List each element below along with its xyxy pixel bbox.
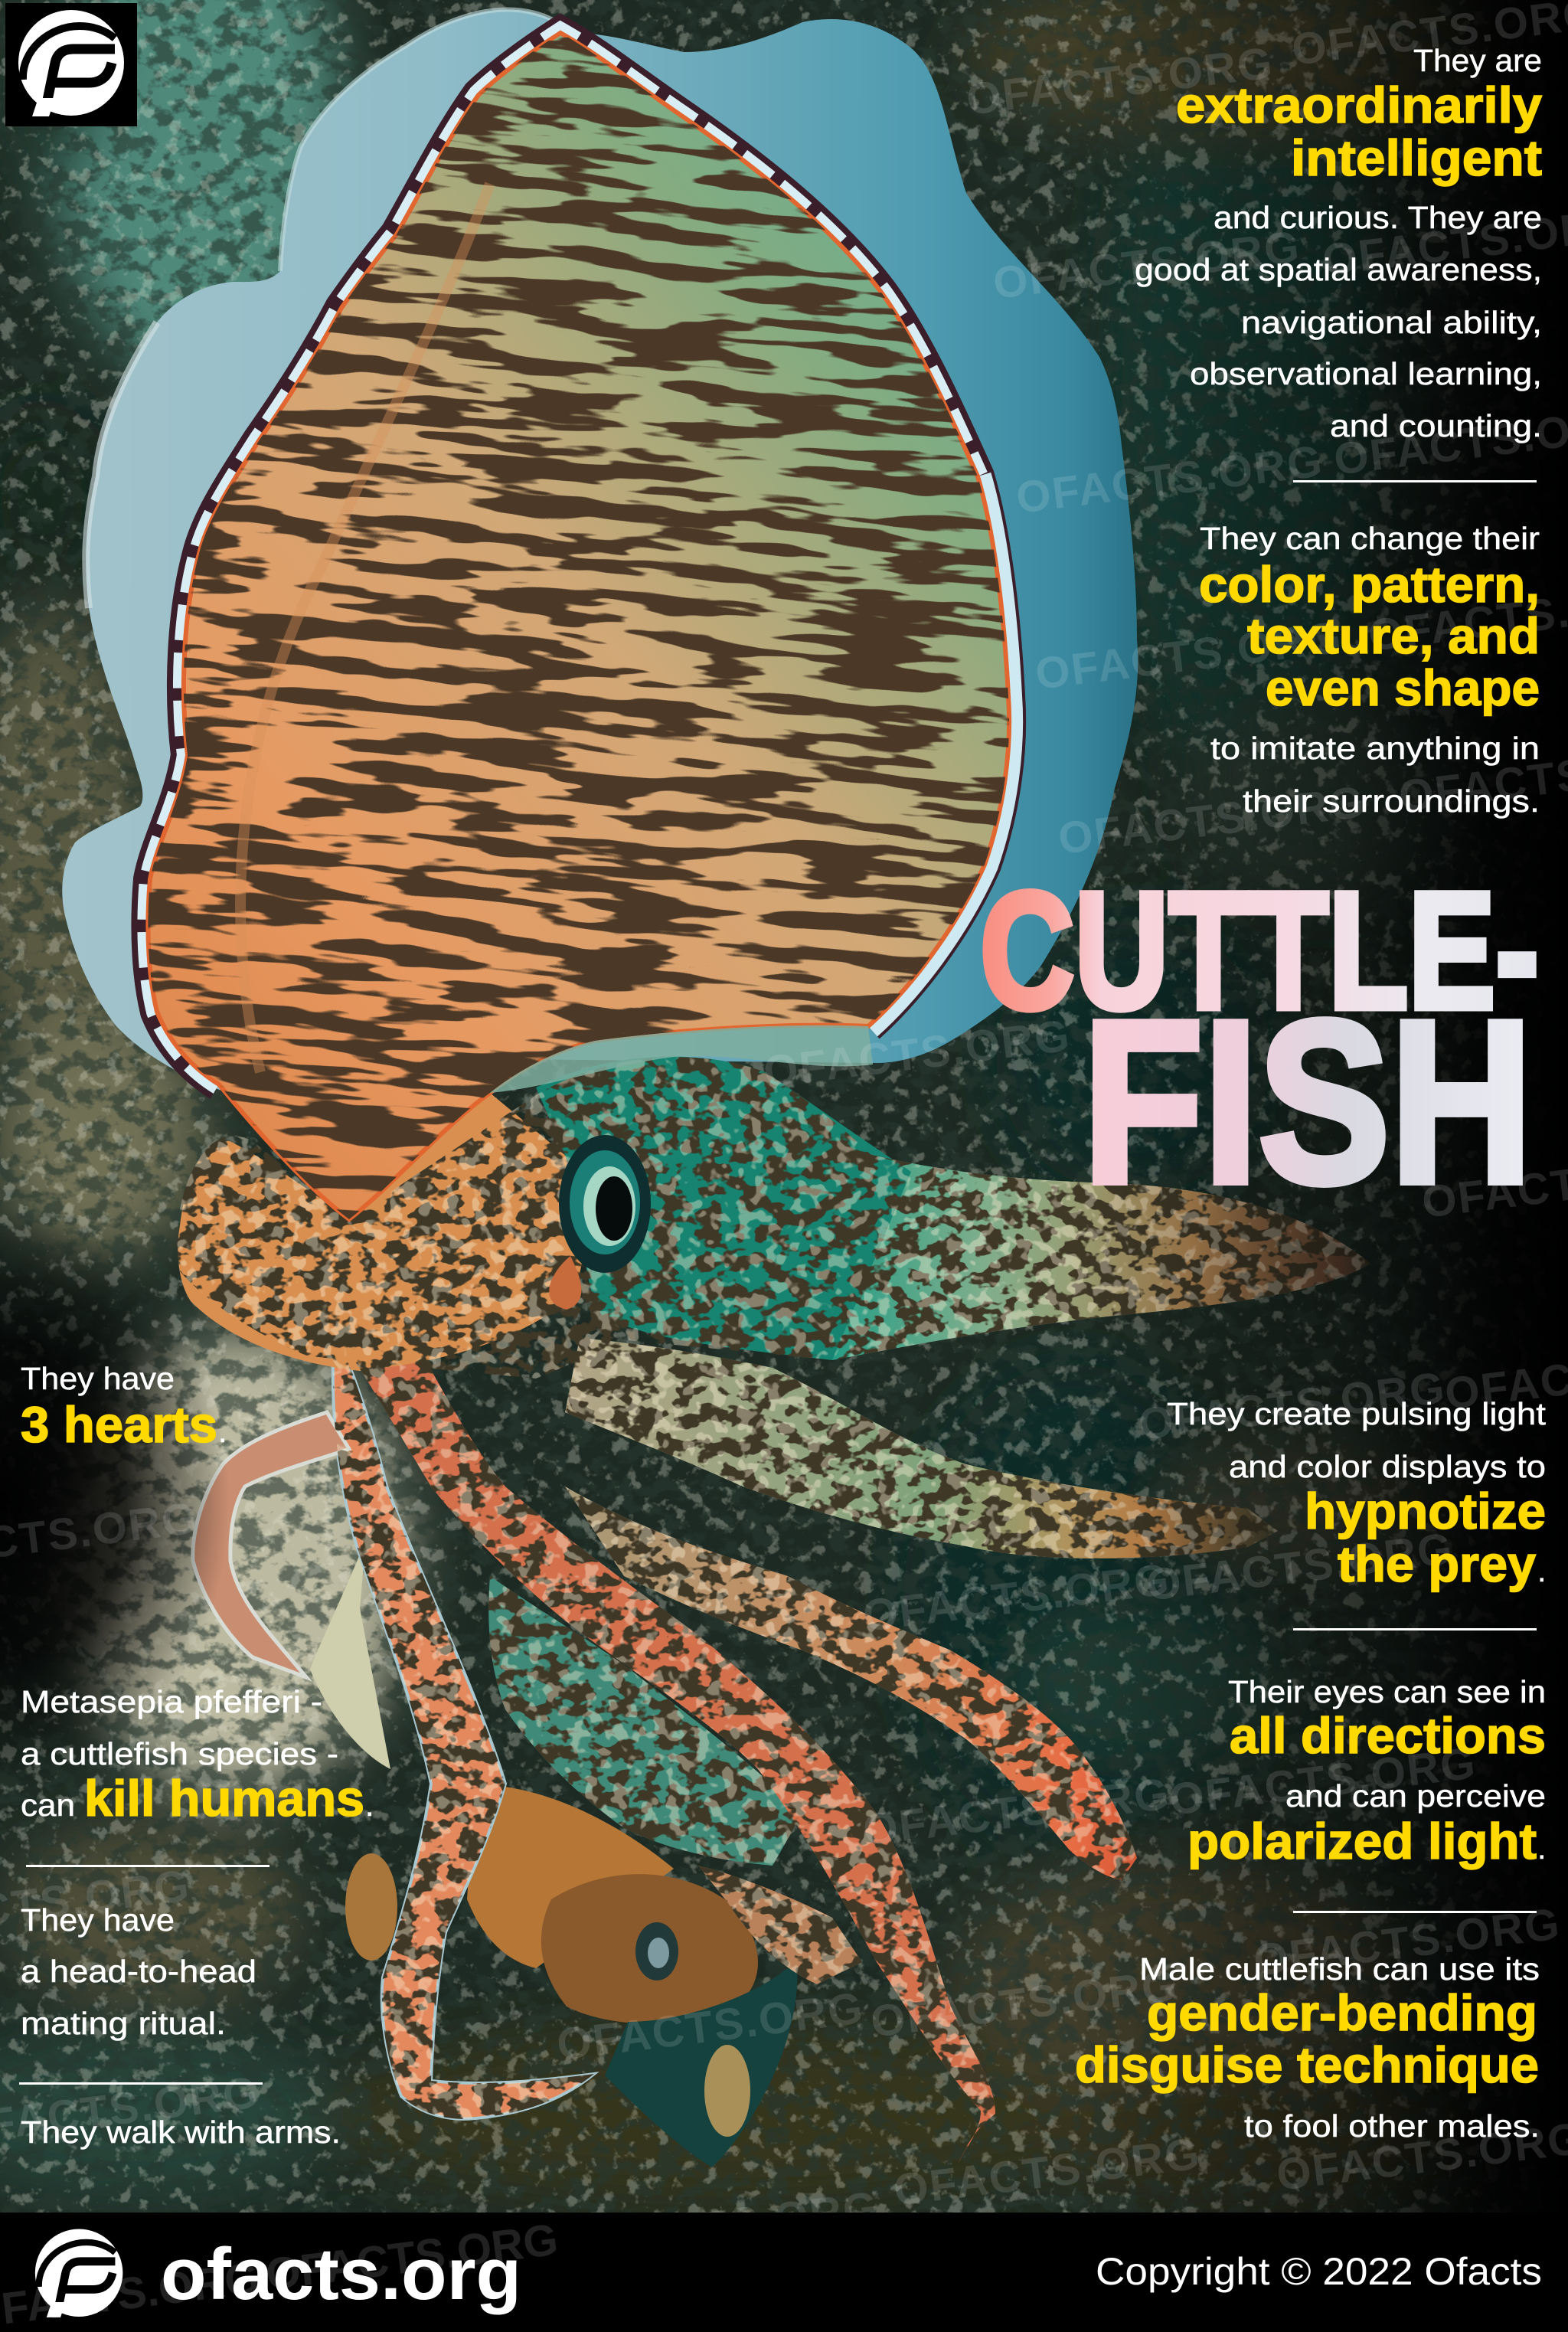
text block: walking: They walk with arms. [21,2114,341,2150]
text block: hypnotize: They create pulsing light [1167,1396,1547,1431]
right side dark gradient [1072,0,1568,2213]
copyright: Copyright © 2022 Ofacts [1096,2250,1542,2293]
text block: kill humans: can [21,1787,75,1823]
footer site name: ofacts.org [161,2233,521,2315]
pale fin beside the arms [310,1539,390,1769]
text block: kill humans: a cuttlefish species - [21,1736,338,1771]
arm: long orange central arm [335,1316,995,2163]
text block: extraordinarily intelligent: good at spatial awareness, [1135,252,1542,287]
text block: extraordinarily intelligent: intelligent [1291,129,1542,186]
text block: kill humans: . [365,1787,374,1823]
text block: colour change: even shape [1266,659,1540,716]
text block: 3 hearts: . [218,1414,227,1449]
text block: extraordinarily intelligent: observational learning, [1190,356,1542,391]
text block: colour change [1199,521,1540,819]
arm and head skin pattern [177,1057,1365,2162]
footer bar: OFACTS.ORG [263,2215,560,2300]
mantle with stripes [145,31,1012,1222]
second cuttlefish behind the arms [310,1539,797,2167]
text block: extraordinarily intelligent: They are [1413,43,1542,78]
arm: lower small curl [698,1866,862,1984]
text block: eyes: Their eyes can see in [1228,1674,1546,1709]
text block: colour change: their surroundings. [1243,783,1540,819]
watermarks: OFACTS.ORG [1136,1362,1449,1450]
arm: upper right teal and orange [832,1145,1370,1360]
watermarks: OFACTS.ORG [891,2128,1204,2216]
text block: eyes: and can perceive [1285,1778,1546,1814]
watermarks: OFACTS.ORG [570,2182,882,2269]
arm: small pale curled arm [193,1412,349,1677]
text block: mating ritual: They have [21,1902,175,1938]
text block: mating ritual: a head-to-head [21,1954,256,1989]
text block: eyes: all directions [1230,1707,1546,1764]
text block: kill humans: kill humans [84,1770,364,1827]
text block: hypnotize: hypnotize [1305,1483,1546,1539]
text block: extraordinarily intelligent: extraordinarily [1176,77,1542,133]
watermarks: OFACTS.ORG [1014,436,1326,523]
watermarks: OFACTS.ORG [964,38,1276,125]
text block: gender-bending: gender-bending [1147,1984,1537,2041]
text block: eyes: . [1537,1830,1546,1866]
watermarks: OFACTS.ORG [861,1768,1173,1856]
watermarks: OFACTS.ORG [991,221,1303,309]
watermarks: OFACTS.ORG [1056,777,1368,864]
text block: hypnotize: the prey [1338,1536,1536,1592]
text block: extraordinarily intelligent: and counting. [1330,408,1542,443]
watermarks: OFACTS.ORG [761,1010,1073,1097]
text block: colour change: color, pattern, [1199,556,1540,613]
left side dark gradient [0,1210,230,1792]
text block: colour change: They can change their [1200,521,1540,556]
fin around the mantle [62,10,1138,1092]
white banded edge of the mantle [148,33,1009,1084]
text block: 3 hearts: 3 hearts [21,1396,217,1453]
head [178,1057,911,1371]
text block: hypnotize: . [1537,1553,1546,1588]
text block: extraordinarily intelligent: navigational ability, [1241,305,1542,340]
head: orange side [178,1093,583,1371]
watermarks: OFACTS.ORG [868,1960,1181,2047]
text block: gender-bending: to fool other males. [1244,2108,1540,2144]
text block: mating ritual: mating ritual. [21,2006,226,2041]
logo: top left [5,3,137,126]
watermarks: OFACTS.ORG [1167,1738,1479,1825]
footer logo [35,2229,122,2317]
watermarks: OFACTS.ORG [554,1983,867,2070]
text block: mating ritual [21,1902,256,2041]
text block: 3 hearts: They have [21,1361,175,1396]
text block: hypnotize: and color displays to [1229,1449,1546,1484]
text block: kill humans: Metasepia pfefferi - [21,1684,322,1719]
arms [193,1145,1370,2163]
head: teal side [536,1057,911,1360]
watermarks: OFACTS.ORG [861,1554,1173,1641]
arm: centre dark green [488,1576,802,1866]
text block: gender-bending [1075,1951,1540,2144]
text block: gender-bending: Male cuttlefish can use its [1139,1951,1540,1987]
arm: second right [565,1338,1278,1558]
text block: eyes [1187,1674,1546,1869]
arm: third right with orange tip [565,1487,1137,1880]
text block: eyes: polarized light [1187,1813,1537,1869]
collar fold between mantle and head [490,1025,873,1093]
arm: long left arm [333,1330,594,2119]
footer bar [0,2213,1568,2332]
title: CUTTLE-FISH [980,858,1539,1231]
watermarks: OFACTS.ORG [1144,1523,1456,1611]
watermarks: OFACTS.ORG [1251,1899,1563,1986]
text block: extraordinarily intelligent: and curious. They are [1214,200,1542,235]
eye [549,1135,651,1310]
text block: colour change: to imitate anything in [1210,731,1540,766]
text block: hypnotize [1167,1396,1547,1592]
text block: colour change: texture, and [1247,607,1540,664]
text block: 3 hearts [21,1361,227,1453]
watermarks: OFACTS.ORG [1033,612,1345,699]
text block: kill humans [21,1684,374,1827]
text block: gender-bending: disguise technique [1075,2036,1539,2093]
text block: extraordinarily intelligent [1135,43,1542,443]
